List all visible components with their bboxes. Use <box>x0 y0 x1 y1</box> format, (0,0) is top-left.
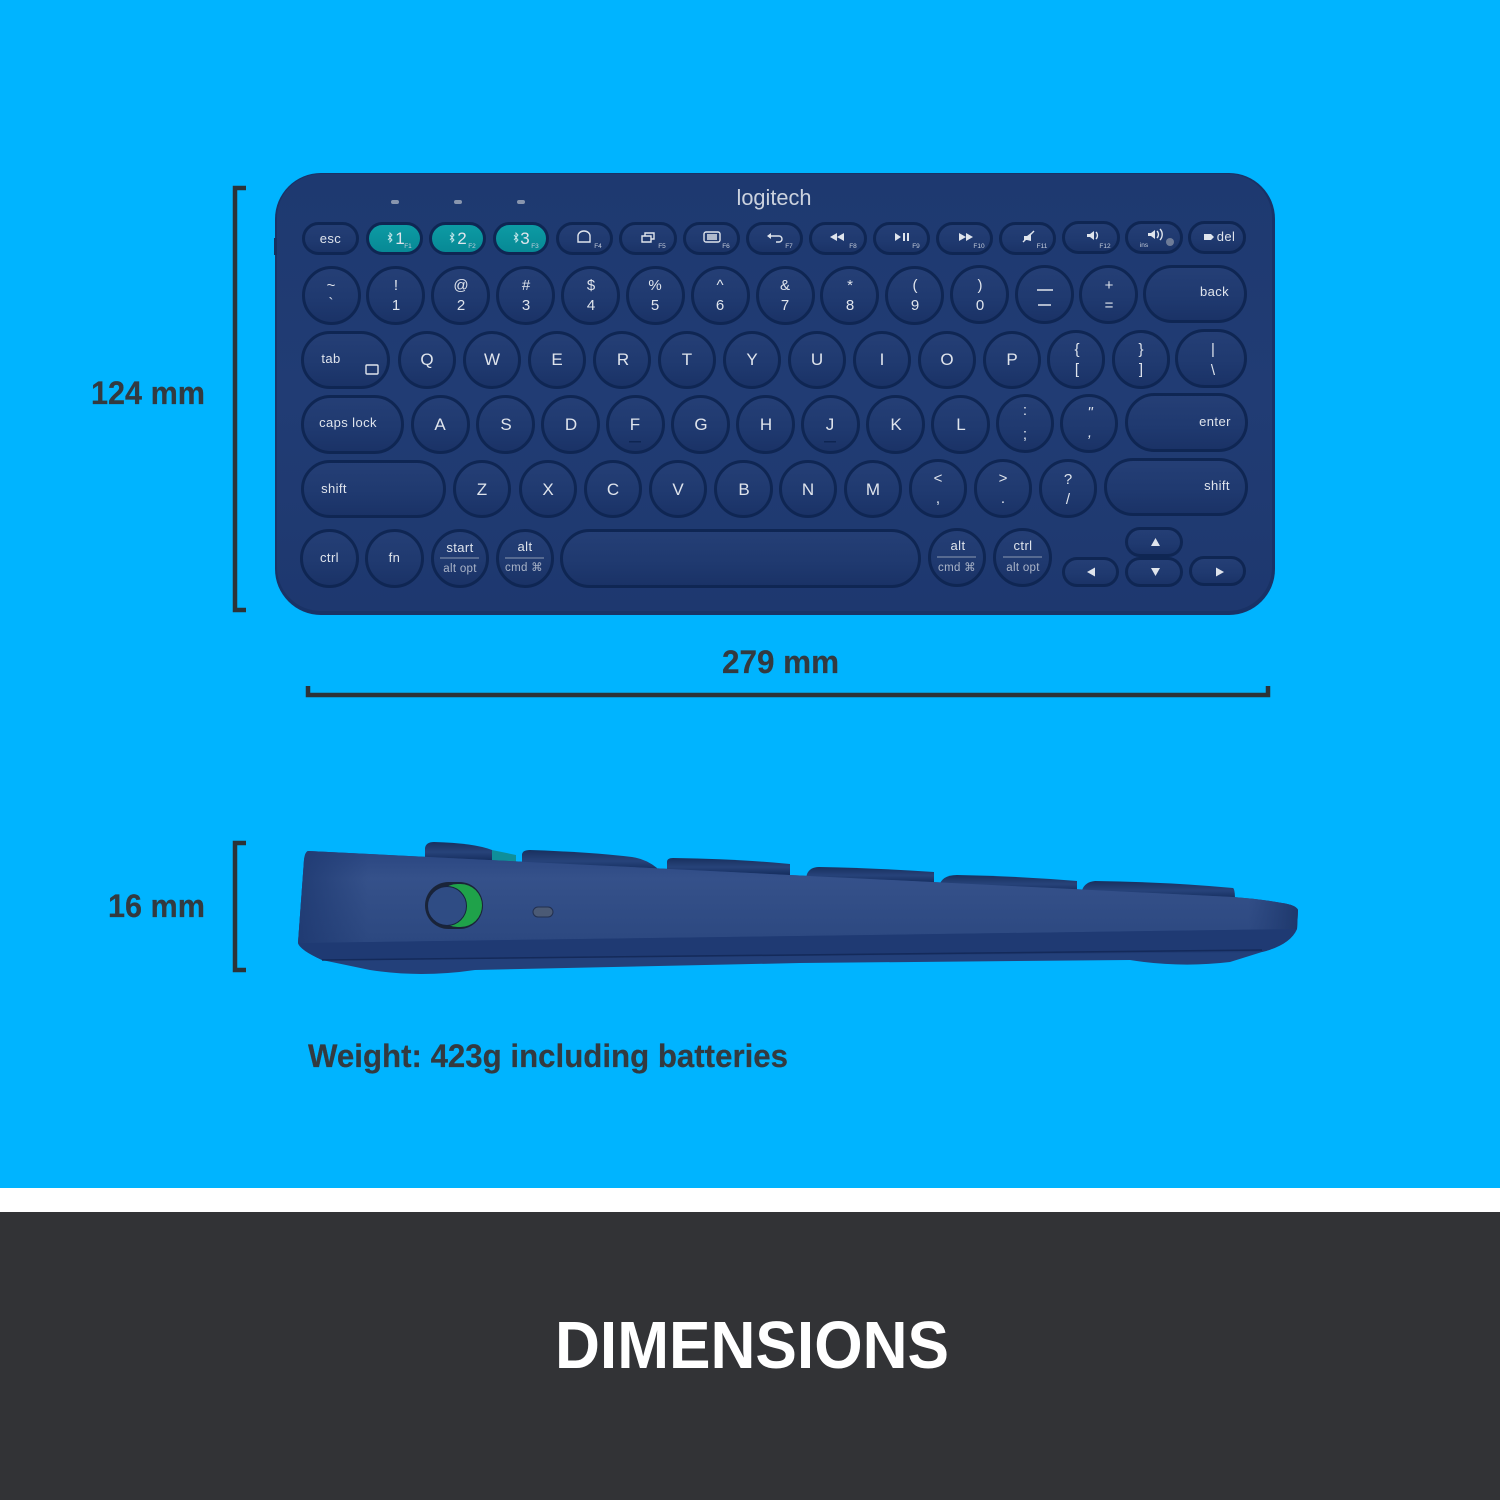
number key row: 9 <box>911 297 919 314</box>
qwerty key row: Y <box>746 350 758 369</box>
number key row: ~ <box>327 277 336 294</box>
home key row: " <box>1087 404 1093 421</box>
function key row: F3 <box>531 243 539 250</box>
qwerty key row <box>302 330 1246 388</box>
modifier key row: alt opt <box>1006 562 1040 574</box>
keyboard top view <box>274 173 1275 615</box>
footer band <box>0 1212 1500 1500</box>
number key row: ( <box>912 277 918 294</box>
number key row <box>304 266 1246 324</box>
number key row: = <box>1105 297 1114 314</box>
home key row: , <box>1088 424 1092 441</box>
function key row: F4 <box>594 243 602 250</box>
home key row: L <box>956 415 966 434</box>
bottom letter key row: N <box>802 480 814 499</box>
bottom letter key row: . <box>1001 490 1005 507</box>
bottom letter key row: V <box>672 480 684 499</box>
function key row: ins <box>1140 242 1149 249</box>
modifier key row: fn <box>389 550 400 565</box>
home key row: caps lock <box>319 415 377 430</box>
qwerty key row: Q <box>420 350 434 369</box>
home key row: S <box>500 415 512 434</box>
function key row: del <box>1217 229 1235 244</box>
qwerty key row: R <box>617 350 629 369</box>
modifier key row: alt <box>518 539 532 554</box>
qwerty key row: \ <box>1211 362 1216 379</box>
modifier key row: start <box>446 540 474 555</box>
bottom letter key row: shift <box>1204 478 1230 493</box>
bottom letter key row: > <box>999 470 1008 487</box>
bottom letter key row: / <box>1066 491 1071 508</box>
space bar <box>562 530 920 586</box>
home key row: H <box>760 415 772 434</box>
function key row: F5 <box>658 243 666 250</box>
keyboard body <box>274 173 1275 615</box>
number key row: ! <box>394 277 398 294</box>
qwerty key row: T <box>682 350 692 369</box>
number key row: # <box>522 277 531 294</box>
qwerty key row: O <box>940 350 954 369</box>
function key row: F8 <box>849 243 857 250</box>
weight note: Weight: 423g including batteries <box>308 1038 788 1074</box>
bottom letter key row: , <box>936 490 940 507</box>
home key row: J <box>826 415 834 434</box>
function key row: F7 <box>785 243 793 250</box>
home key row: F <box>630 415 640 434</box>
number key row: @ <box>453 277 469 294</box>
qwerty key row: tab <box>321 351 341 366</box>
function key row: esc <box>320 231 341 246</box>
home key row: D <box>565 415 577 434</box>
function key row: F12 <box>1099 243 1111 250</box>
number key row: 3 <box>522 297 530 314</box>
home key row <box>302 394 1246 452</box>
qwerty key row: ] <box>1139 361 1143 378</box>
number key row: 2 <box>457 297 465 314</box>
modifier key row: cmd ⌘ <box>938 561 976 574</box>
number key row: + <box>1105 277 1114 294</box>
home key row: A <box>434 415 446 434</box>
logo: logitech <box>736 185 812 210</box>
number key row: 8 <box>846 297 854 314</box>
number key row: 0 <box>976 297 984 314</box>
bottom letter key row: Z <box>477 480 487 499</box>
modifier key row: alt opt <box>443 563 477 575</box>
number key row: ) <box>978 277 982 294</box>
function key row: F10 <box>973 243 985 250</box>
side key caps <box>425 842 1235 900</box>
number key row: ^ <box>716 277 724 294</box>
function key row: F9 <box>912 243 920 250</box>
number key row: 7 <box>781 297 789 314</box>
background panel <box>0 0 1500 1188</box>
bracket: thickness <box>235 843 246 970</box>
home key row: enter <box>1199 414 1231 429</box>
home key row: G <box>694 415 708 434</box>
bottom letter key row <box>302 460 1246 516</box>
function key row: F1 <box>404 243 412 250</box>
home key row: ; <box>1023 426 1027 443</box>
home key row: K <box>890 415 902 434</box>
function key row <box>304 222 1244 254</box>
modifier key row: ctrl <box>320 550 339 565</box>
label: 124 mm: 124 mm <box>91 375 205 411</box>
status LEDs <box>391 200 525 204</box>
side body <box>298 851 1298 974</box>
qwerty key row: I <box>880 350 884 369</box>
bottom letter key row: < <box>934 470 943 487</box>
number key row: $ <box>587 277 596 294</box>
number key row: % <box>648 277 662 294</box>
qwerty key row: } <box>1138 341 1144 358</box>
function key row: F6 <box>722 243 730 250</box>
bracket: width <box>308 686 1268 695</box>
power switch <box>425 882 483 929</box>
modifier key row <box>302 530 1050 586</box>
lower band <box>298 929 1297 960</box>
number key row: 1 <box>392 297 400 314</box>
function key row: 2 <box>457 229 467 248</box>
arrow keys <box>1064 528 1244 586</box>
qwerty key row: { <box>1074 341 1080 358</box>
bottom letter key row: X <box>542 480 554 499</box>
label: 279 mm: 279 mm <box>722 644 839 680</box>
modifier key row: alt <box>951 538 965 553</box>
number key row: ` <box>328 295 334 312</box>
number key row: * <box>847 277 853 294</box>
qwerty key row: E <box>551 350 563 369</box>
modifier key row: cmd ⌘ <box>505 561 543 574</box>
side face <box>298 851 1298 943</box>
bottom letter key row: ? <box>1064 471 1072 488</box>
footer title: DIMENSIONS <box>555 1308 949 1383</box>
white divider <box>0 1188 1500 1212</box>
modifier key row: ctrl <box>1014 538 1032 553</box>
qwerty key row: [ <box>1075 361 1080 378</box>
bottom letter key row: B <box>738 480 750 499</box>
qwerty key row: U <box>811 350 823 369</box>
qwerty key row: W <box>484 350 500 369</box>
keyboard side view <box>298 842 1298 974</box>
qwerty key row: P <box>1006 350 1018 369</box>
number key row: & <box>780 277 790 294</box>
number key row: back <box>1200 284 1229 299</box>
bottom letter key row: M <box>866 480 880 499</box>
qwerty key row: | <box>1211 341 1215 358</box>
bottom letter key row: shift <box>321 481 347 496</box>
bracket: height <box>235 188 246 610</box>
function key row: 1 <box>395 229 405 248</box>
home key row: : <box>1023 402 1027 419</box>
label: 16 mm: 16 mm <box>108 888 205 924</box>
function key row: F2 <box>468 243 476 250</box>
number key row: 4 <box>587 297 595 314</box>
status LED <box>533 907 553 917</box>
function key row: 3 <box>520 229 530 248</box>
function key row: F11 <box>1037 243 1048 250</box>
number key row: 6 <box>716 297 724 314</box>
bottom letter key row: C <box>607 480 619 499</box>
number key row: 5 <box>651 297 659 314</box>
